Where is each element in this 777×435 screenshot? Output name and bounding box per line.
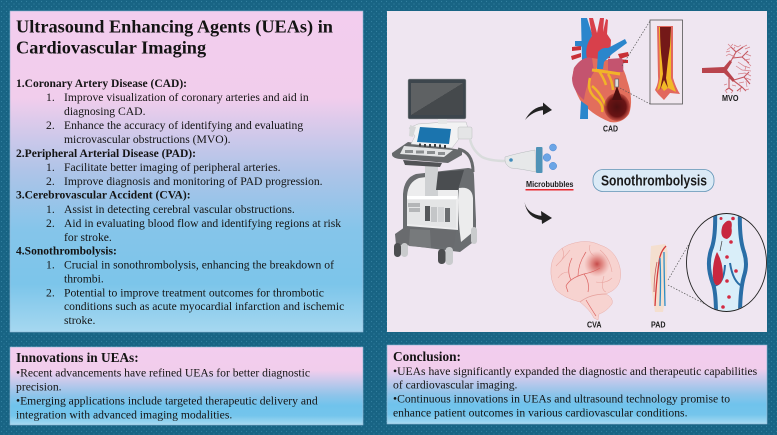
label: microbubbles: Microbubbles (526, 179, 574, 189)
text: conclusion bullets: •UEAs have significantly expanded the diagnostic and therapeutic capabilities (393, 365, 758, 378)
section: coronary artery disease (16, 78, 309, 146)
section: peripheral arterial disease: Facilitate better imaging of peripheral arteries. (64, 161, 281, 174)
icon: microvascular tree (702, 44, 751, 93)
clots (713, 252, 723, 285)
section: sonothrombolysis: 1. (46, 258, 55, 272)
title: Cardiovascular Imaging (16, 38, 206, 58)
arrow: to brain (524, 202, 552, 224)
section: sonothrombolysis (16, 246, 344, 327)
probe (505, 150, 536, 172)
section: sonothrombolysis: Potential to improve treatment outcomes for thrombotic (64, 286, 324, 300)
text: innovations bullets: •Recent advancements have refined UEAs for better diagnostic (16, 367, 310, 380)
panel: innovations in UEAs (10, 347, 363, 425)
section: coronary artery disease: 1. (46, 91, 55, 104)
section: cerebrovascular accident (16, 190, 341, 244)
text: innovations bullets: •Emerging applications include targeted therapeutic delivery and (16, 394, 318, 408)
label pill: sonothrombolysis: Sonothrombolysis (601, 174, 707, 190)
cart body (403, 168, 476, 252)
label: CVA: CVA (587, 320, 602, 330)
icon: leg with arteries (650, 244, 668, 312)
section: cerebrovascular accident: 1. (46, 203, 55, 216)
section: cerebrovascular accident: Assist in detecting cerebral vascular obstructions. (64, 203, 295, 216)
base and wheels (395, 227, 456, 247)
callout lines (668, 244, 705, 304)
section: peripheral arterial disease: 2. (46, 175, 55, 188)
text: innovations bullets (16, 367, 318, 422)
section: peripheral arterial disease: 2.Peripheral Arterial Disease (PAD): (16, 148, 196, 160)
icon: brain (551, 242, 621, 320)
section: peripheral arterial disease: 1. (46, 161, 55, 174)
text: innovations bullets: precision. (16, 381, 62, 394)
text: conclusion bullets: •Continuous innovations in UEAs and ultrasound technology promise to (393, 393, 730, 406)
icon: heart with coronary arteries (571, 18, 631, 122)
console screen (417, 127, 451, 144)
section: sonothrombolysis: stroke. (64, 314, 95, 327)
panel: illustration (387, 11, 767, 332)
keyboard (392, 142, 462, 163)
callout: vessel with clot (686, 210, 766, 316)
label pill: sonothrombolysis (593, 170, 714, 192)
cable (470, 139, 506, 161)
section: coronary artery disease: microvascular obstructions (MVO). (64, 133, 231, 146)
panel: conclusion (387, 345, 767, 424)
section: sonothrombolysis: conditions such as acute myocardial infarction and ischemic (64, 300, 344, 313)
section: peripheral arterial disease: Improve diagnosis and monitoring of PAD progression. (64, 175, 323, 188)
section: cerebrovascular accident: 2. (46, 217, 55, 230)
text: conclusion bullets (393, 365, 758, 420)
label: MVO: MVO (722, 94, 738, 103)
vessel lumen (711, 214, 744, 311)
panel: UEAs in cardiovascular imaging (10, 11, 363, 332)
section: cerebrovascular accident: Aid in evaluating blood flow and identifying regions at risk (64, 217, 341, 230)
section: coronary artery disease: diagnosing CAD. (64, 105, 146, 118)
vessel walls (709, 210, 746, 316)
title: Ultrasound Enhancing Agents (UEAs) in (16, 16, 333, 38)
control console (409, 122, 467, 148)
section: sonothrombolysis: 4.Sonothrombolysis: (16, 246, 117, 258)
inset: coronary plaque (620, 20, 682, 104)
monitor (408, 79, 466, 119)
section: coronary artery disease: Improve visualization of coronary arteries and aid in (64, 91, 309, 104)
section: coronary artery disease: 1.Coronary Artery Disease (CAD): (16, 78, 187, 90)
text: conclusion bullets: enhance patient outcomes in various cardiovascular conditions. (393, 407, 688, 420)
icon: microbubbles (543, 144, 557, 170)
heading: innovations: Innovations in UEAs: (16, 350, 139, 365)
icon: ultrasound machine (392, 79, 542, 265)
text: conclusion bullets: of cardiovascular imaging. (393, 379, 518, 392)
section: peripheral arterial disease (16, 148, 323, 188)
handle (458, 149, 473, 172)
section: cerebrovascular accident: for stroke. (64, 231, 112, 244)
label: CAD: CAD (603, 124, 618, 134)
heading: conclusion: Conclusion: (393, 349, 461, 364)
section: cerebrovascular accident: 3.Cerebrovascular Accident (CVA): (16, 190, 191, 202)
title (16, 16, 333, 58)
section: coronary artery disease: Enhance the accuracy of identifying and evaluating (64, 119, 303, 132)
section: coronary artery disease: 2. (46, 119, 55, 132)
text: innovations bullets: integration with advanced imaging modalities. (16, 409, 232, 422)
section: sonothrombolysis: Crucial in sonothrombolysis, enhancing the breakdown of (64, 258, 334, 272)
section: sonothrombolysis: thrombi. (64, 272, 104, 286)
section: sonothrombolysis: 2. (46, 286, 55, 300)
label: PAD: PAD (651, 320, 666, 330)
arrow: to heart (525, 102, 552, 120)
